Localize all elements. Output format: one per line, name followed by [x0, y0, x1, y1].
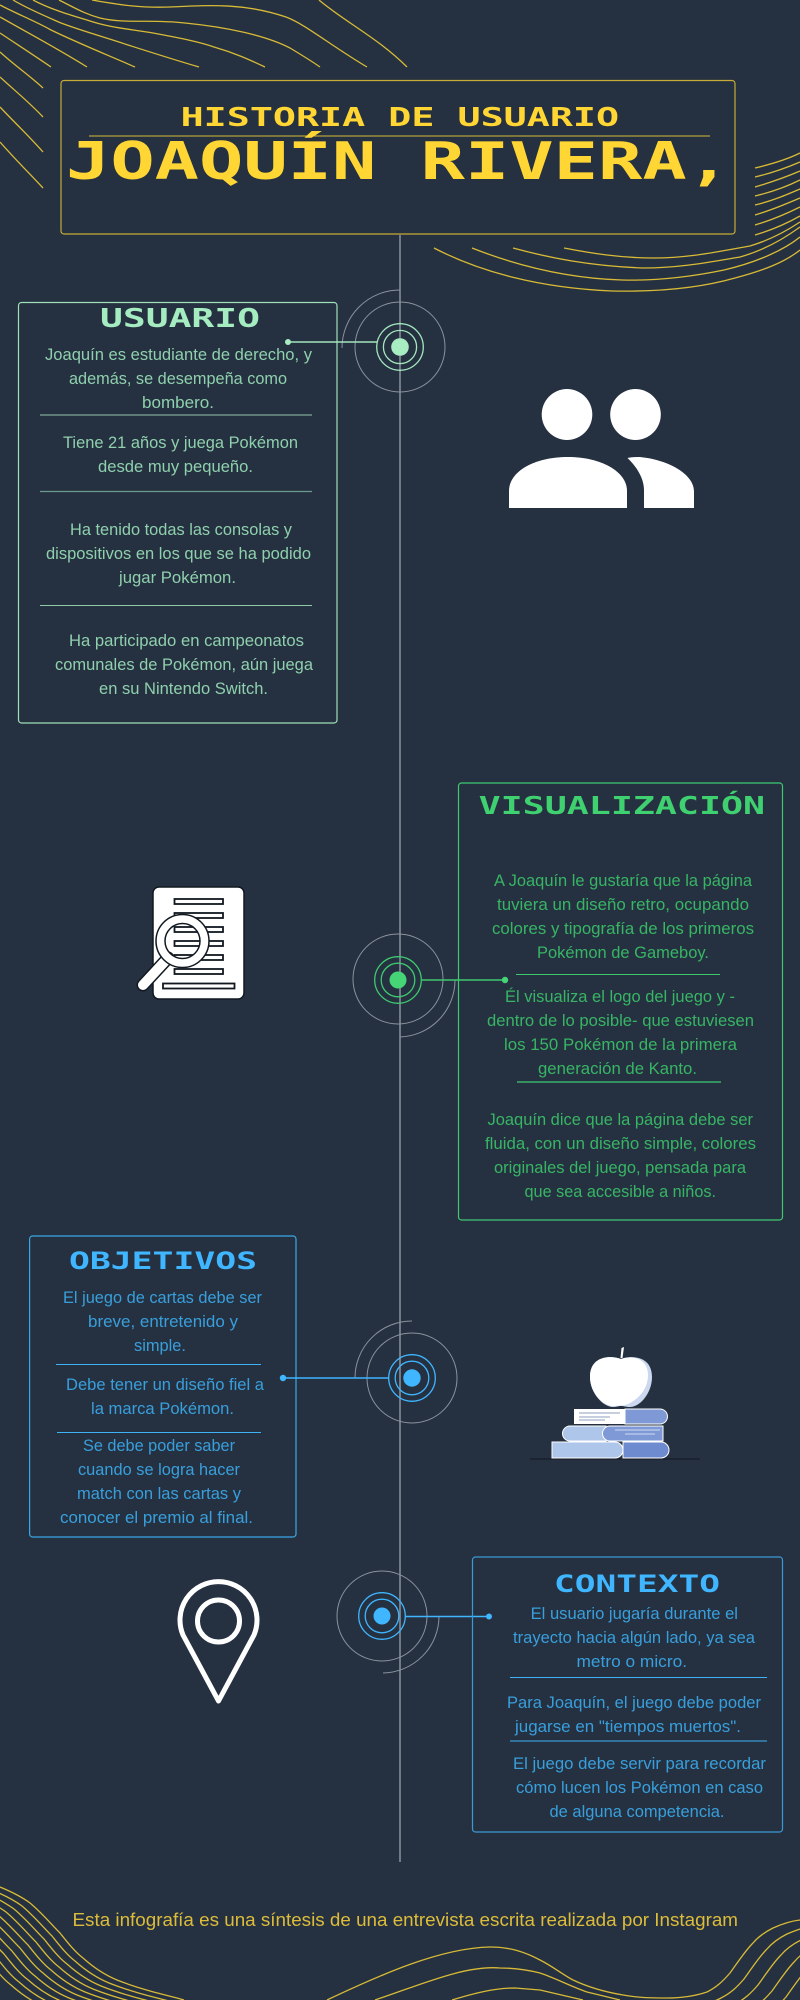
text block: usuario 4: en su Nintendo Switch. [99, 680, 268, 698]
text block: visualización 2: los 150 Pokémon de la primera [504, 1036, 738, 1054]
text block: visualización 3: fluida, con un diseño simple, colores [485, 1135, 756, 1153]
text block: visualización 3: Joaquín dice que la página debe ser [488, 1111, 753, 1129]
timeline marker: contexto [337, 1571, 492, 1673]
text block: contexto 2 [507, 1694, 761, 1736]
text block: usuario 4: comunales de Pokémon, aún juega [55, 656, 314, 674]
text block: usuario 1: Joaquín es estudiante de derecho, y [45, 346, 313, 364]
text block: contexto 1: metro o micro. [576, 1653, 687, 1671]
text block: visualización 2: dentro de lo posible- que estuviesen [487, 1012, 754, 1030]
text block: usuario 1: bombero. [142, 394, 214, 412]
title panel [61, 80, 735, 234]
panel: objetivos [30, 1236, 296, 1537]
text block: usuario 1: además, se desempeña como [69, 370, 287, 388]
text block: objetivos 3: match con las cartas y [77, 1485, 242, 1503]
text block: contexto 3: de alguna competencia. [550, 1803, 724, 1821]
text block: contexto 3 [513, 1755, 767, 1821]
text block: usuario 2: Tiene 21 años y juega Pokémon [63, 434, 298, 452]
text block: contexto 1 [513, 1605, 756, 1671]
text block: visualización 3 [485, 1111, 756, 1201]
text block: contexto 2: Para Joaquín, el juego debe poder [507, 1694, 761, 1712]
panel: contexto [472, 1557, 782, 1832]
text block: objetivos 2: Debe tener un diseño fiel a [66, 1376, 265, 1394]
text block: contexto 2: jugarse en "tiempos muertos". [514, 1718, 741, 1736]
text block: visualización 1 [492, 872, 754, 962]
subtitle: HISTORIA DE USUARIO [181, 103, 619, 133]
text block: objetivos 1: breve, entretenido y [88, 1313, 239, 1331]
panel: visualización [458, 783, 782, 1220]
text block: usuario 3: jugar Pokémon. [118, 569, 236, 587]
text block: usuario 3 [46, 521, 311, 587]
text block: visualización 2 [487, 987, 754, 1078]
text block: usuario 3: dispositivos en los que se ha podido [46, 545, 311, 563]
text block: usuario 1 [45, 346, 313, 412]
text block: contexto 3: cómo lucen los Pokémon en caso [516, 1779, 763, 1797]
heading: objetivos: OBJETIVOS [69, 1247, 257, 1275]
text block: usuario 4: Ha participado en campeonatos [69, 632, 304, 650]
text block: visualización 1: A Joaquín le gustaría que la página [494, 872, 753, 890]
panel: usuario [18, 302, 337, 723]
text block: usuario 4 [55, 632, 314, 698]
footer note: Esta infografía es una síntesis de una entrevista escrita realizada por Instagram [72, 1909, 738, 1930]
text block: contexto 1: El usuario jugaría durante el [531, 1605, 738, 1623]
heading: contexto: CONTEXTO [554, 1570, 720, 1598]
title name: JOAQUÍN RIVERA, [66, 131, 731, 192]
text block: visualización 2: Él visualiza el logo del juego y - [505, 987, 735, 1006]
timeline marker: objetivos [280, 1321, 457, 1423]
timeline marker: visualización [353, 934, 508, 1037]
text block: objetivos 3: Se debe poder saber [83, 1437, 235, 1455]
text block: usuario 3: Ha tenido todas las consolas y [70, 521, 293, 539]
text block: objetivos 3 [60, 1437, 253, 1527]
text block: visualización 2: generación de Kanto. [538, 1060, 697, 1078]
text block: objetivos 1 [63, 1289, 262, 1355]
text block: objetivos 1: El juego de cartas debe ser [63, 1289, 262, 1307]
icon: location pin [180, 1582, 257, 1701]
text block: objetivos 2: la marca Pokémon. [91, 1400, 234, 1418]
text block: visualización 1: colores y tipografía de los primeros [492, 920, 754, 938]
text block: visualización 1: tuviera un diseño retro, ocupando [497, 896, 749, 914]
icon: people [509, 389, 694, 508]
text block: objetivos 3: cuando se logra hacer [78, 1461, 240, 1479]
text block: usuario 2: desde muy pequeño. [98, 458, 253, 476]
heading: usuario: USUARIO [100, 304, 260, 334]
text block: objetivos 1: simple. [134, 1337, 186, 1355]
text block: objetivos 3: conocer el premio al final. [60, 1509, 253, 1527]
timeline marker: usuario [285, 290, 445, 392]
heading: visualización: VISUALIZACIÓN [479, 790, 765, 820]
icon: document with magnifier [143, 887, 244, 999]
text block: contexto 3: El juego debe servir para recordar [513, 1755, 767, 1773]
text block: usuario 2 [63, 434, 298, 476]
icon: apple on books [530, 1347, 700, 1459]
text block: contexto 1: trayecto hacia algún lado, ya sea [513, 1629, 756, 1647]
text block: visualización 3: originales del juego, pensada para [494, 1159, 747, 1177]
text block: visualización 1: Pokémon de Gameboy. [537, 944, 709, 962]
text block: objetivos 2 [66, 1376, 265, 1418]
text block: visualización 3: que sea accesible a niños. [524, 1183, 716, 1201]
